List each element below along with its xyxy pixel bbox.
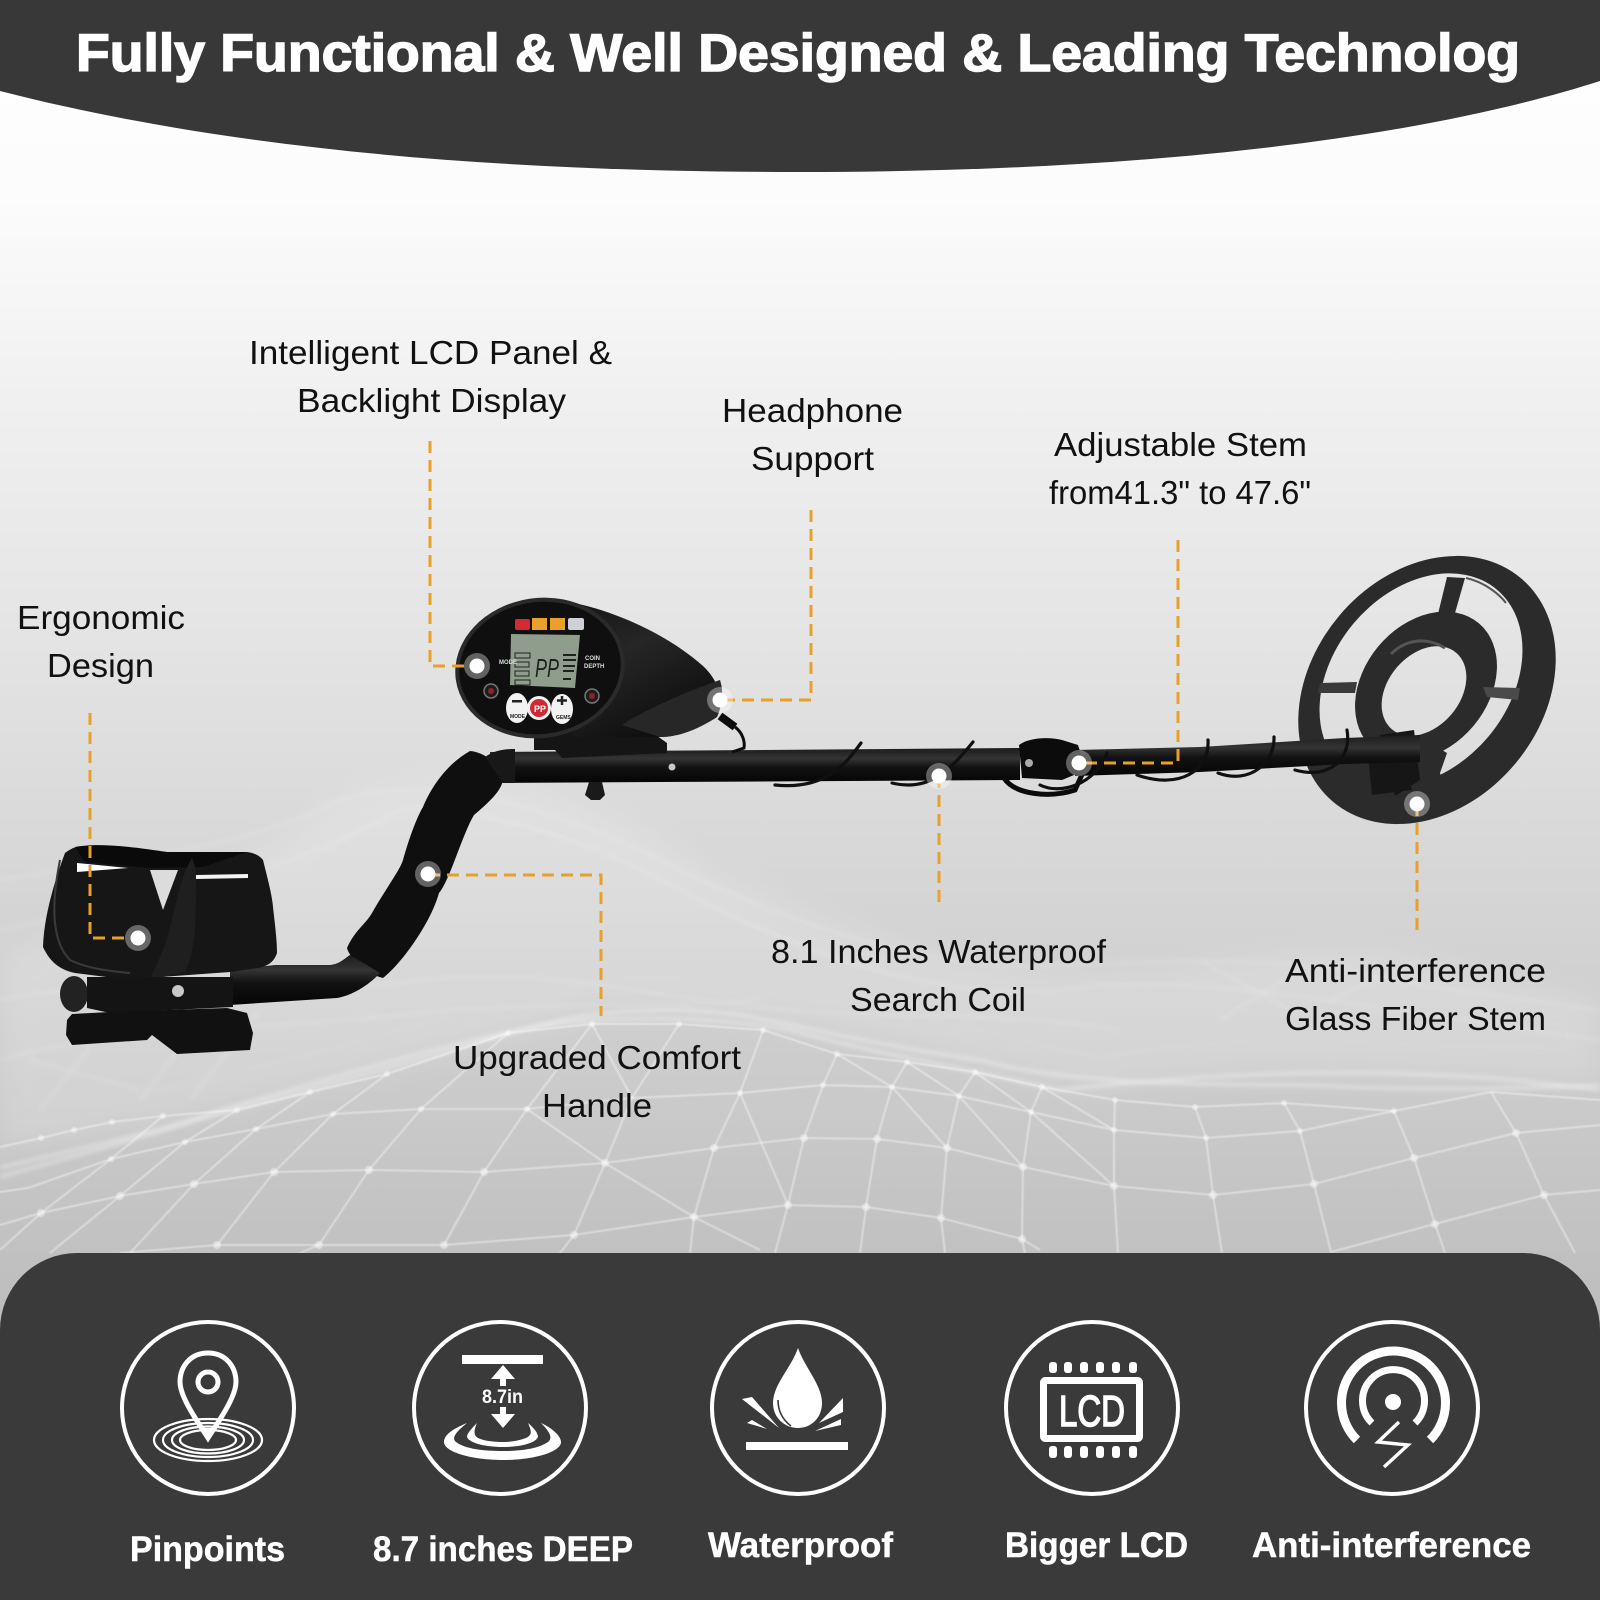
callout: comfort handle	[415, 861, 741, 1124]
callout: adjustable stem: from41.3" to 47.6"	[1049, 474, 1311, 511]
callout: search coil: 8.1 Inches Waterproof	[771, 933, 1107, 970]
feature: 8.7 inches deep	[373, 1322, 633, 1569]
feature: waterproof: Waterproof	[708, 1526, 893, 1565]
lower adjustable stem	[1075, 735, 1420, 776]
feature: 8.7 inches deep: 8.7in	[482, 1387, 523, 1408]
callout: search coil: Search Coil	[850, 981, 1026, 1018]
arm cuff	[43, 845, 277, 980]
console face: PP	[534, 704, 546, 714]
feature: 8.7 inches deep: 8.7 inches DEEP	[373, 1530, 633, 1569]
console face: GEMS	[556, 715, 571, 721]
coil cable spirals	[775, 730, 1348, 789]
callout: ergonomic design	[17, 599, 185, 951]
headphone cable	[720, 716, 744, 752]
title: Fully Functional & Well Designed & Leading Technolog	[76, 24, 1520, 83]
tube screw	[668, 764, 676, 770]
console face: MODE	[510, 714, 526, 720]
console face: DEPTH	[584, 664, 604, 670]
callout: glass fiber stem: Glass Fiber Stem	[1285, 1000, 1546, 1037]
feature: pinpoints: Pinpoints	[130, 1530, 285, 1569]
bottom features panel	[0, 1253, 1600, 1600]
feature: pinpoints	[122, 1322, 294, 1569]
callout: LCD panel	[249, 334, 612, 679]
callout: comfort handle: Handle	[542, 1087, 652, 1124]
feature: anti-interference: Anti-interference	[1252, 1526, 1531, 1565]
callout: adjustable stem	[1049, 426, 1311, 776]
background network mesh	[0, 783, 1600, 1253]
stem tube	[490, 748, 1020, 783]
arm clamp and foot	[60, 976, 253, 1054]
console face: COIN	[585, 656, 600, 662]
callout: search coil	[771, 763, 1107, 1018]
stem collar	[1004, 738, 1086, 794]
callout: ergonomic design: Ergonomic	[17, 599, 185, 636]
callout: LCD panel: Intelligent LCD Panel &	[249, 334, 612, 371]
callout: headphone support: Headphone	[722, 392, 903, 429]
feature: waterproof	[708, 1322, 893, 1565]
feature: bigger LCD: Bigger LCD	[1005, 1526, 1188, 1565]
callout: comfort handle: Upgraded Comfort	[453, 1039, 741, 1076]
console face: MODE	[499, 660, 517, 666]
feature: anti-interference	[1252, 1322, 1531, 1565]
header band	[0, 0, 1600, 172]
console face: PP	[535, 653, 559, 683]
callout: headphone support	[707, 392, 903, 713]
callout: glass fiber stem	[1285, 791, 1546, 1037]
callout: ergonomic design: Design	[47, 647, 154, 684]
comfort handle foam grip	[347, 751, 503, 978]
feature: bigger LCD: LCD	[1059, 1387, 1125, 1436]
console bracket	[534, 728, 667, 758]
callout: glass fiber stem: Anti-interference	[1285, 952, 1546, 989]
console face	[446, 587, 634, 749]
callout: headphone support: Support	[751, 440, 874, 477]
console body	[560, 600, 720, 737]
metal detector product	[43, 504, 1600, 1054]
upper bend tube	[485, 749, 515, 783]
search coil	[1298, 556, 1556, 824]
feature: bigger LCD	[1005, 1322, 1188, 1565]
arm tube	[230, 955, 380, 1005]
callout: adjustable stem: Adjustable Stem	[1054, 426, 1307, 463]
tightening knob	[585, 782, 605, 800]
callout: LCD panel: Backlight Display	[297, 382, 567, 419]
